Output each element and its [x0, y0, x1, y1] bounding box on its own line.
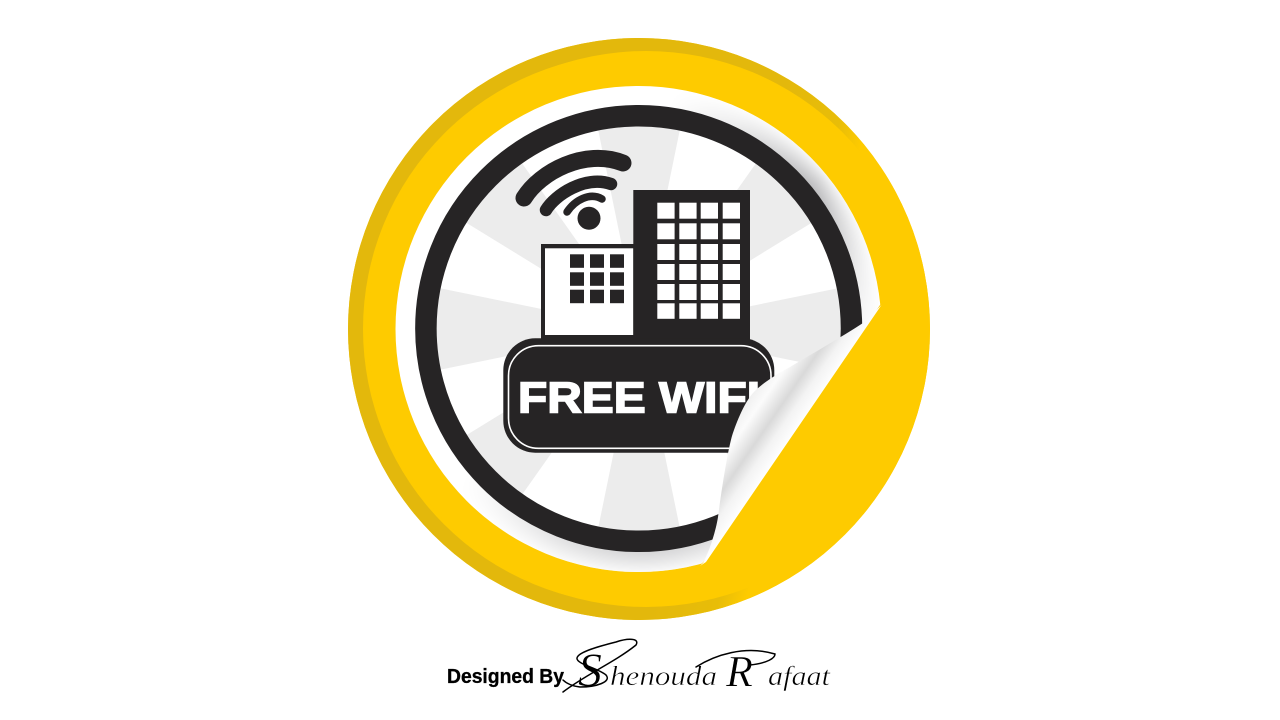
FREE WIFI label badge [503, 338, 774, 453]
signature: R [725, 647, 753, 696]
badge text: FREE WIFI [518, 374, 760, 423]
peeling white sticker [396, 86, 882, 572]
peeled corner flap [700, 305, 882, 566]
signature: henouda [610, 661, 717, 691]
sticker face [396, 86, 882, 572]
infographic canvas [348, 38, 930, 693]
signature swashes [563, 639, 775, 692]
icon: tall building [633, 190, 750, 346]
signature: afaat [768, 661, 832, 691]
sticker edge shading [492, 100, 880, 572]
grey sunburst rays [436, 126, 842, 532]
icon: wifi signal [524, 158, 623, 230]
black ring [426, 116, 852, 541]
designed by label: Designed By [447, 666, 565, 688]
credit line [447, 639, 832, 697]
icon: small building [541, 244, 635, 346]
interior white disc [523, 132, 836, 526]
signature: S [578, 644, 602, 697]
yellow base disc [348, 38, 930, 620]
